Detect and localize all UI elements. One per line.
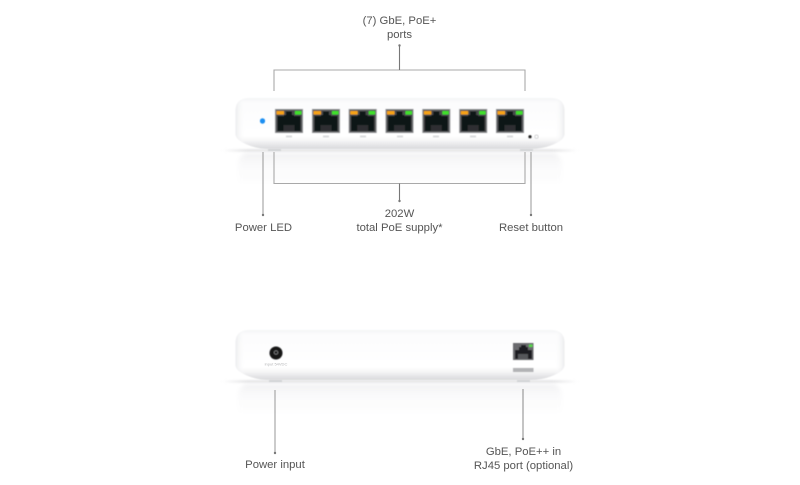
label: power LED: Power LED (235, 222, 292, 234)
arrow dot: PoE supply (398, 200, 401, 202)
device body: rear (236, 330, 564, 380)
label: PoE supply: total PoE supply* (356, 222, 443, 234)
leader: RJ45 in port (522, 389, 524, 440)
label: PoE supply: 202W (385, 208, 414, 220)
leader: power input (274, 390, 276, 454)
port numbers marks (286, 136, 513, 138)
icon: reset button (528, 135, 538, 138)
label: PoE+ ports: ports (387, 29, 412, 41)
label: RJ45 in port: RJ45 port (optional) (474, 460, 573, 472)
icon: power LED (260, 118, 265, 124)
bracket: top PoE+ ports (274, 46, 525, 91)
device feet: front (268, 149, 533, 151)
label: RJ45 in port: GbE, PoE++ in (486, 446, 561, 458)
leader: reset button (530, 152, 532, 216)
label: PoE+ ports: (7) GbE, PoE+ (363, 15, 436, 27)
bracket: total PoE supply (274, 152, 525, 201)
panel: front view of switch (222, 98, 578, 186)
shelf shadow: front (222, 150, 578, 152)
device feet: rear (269, 380, 530, 382)
device body: front (236, 98, 564, 149)
label: input voltage: input 54VDC (265, 362, 287, 366)
arrow dot: top bracket (398, 44, 401, 47)
icon: power jack (270, 346, 282, 360)
shelf shadow: rear (222, 380, 578, 382)
label: power input: Power input (245, 459, 306, 471)
icon: RJ45 port (513, 343, 534, 360)
reflection: front (238, 153, 562, 186)
label: RJ45 port tag (513, 368, 534, 372)
label: reset button: Reset button (499, 222, 563, 234)
reflection: rear (238, 384, 562, 415)
panel: rear view of switch (222, 330, 578, 415)
leader: power LED (262, 152, 264, 216)
ethernet ports (275, 109, 524, 133)
